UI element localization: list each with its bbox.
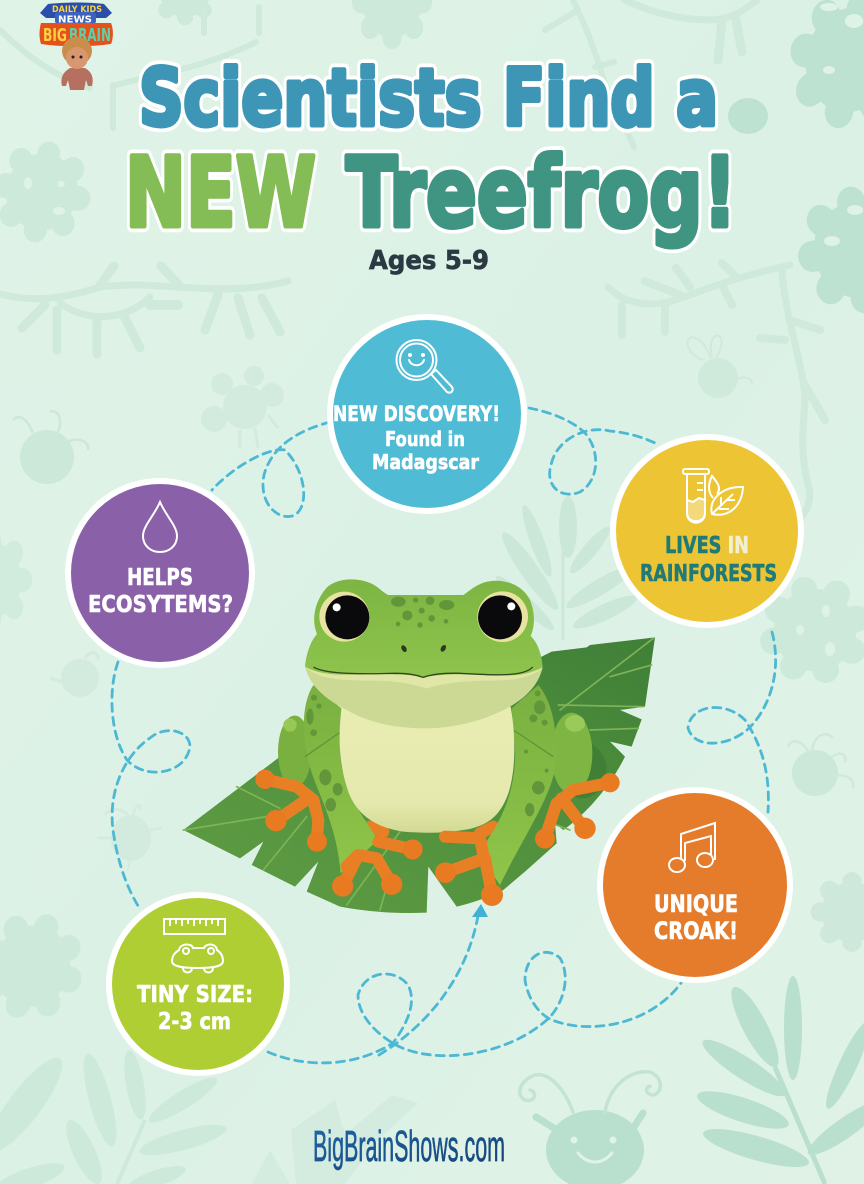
lip bbox=[305, 667, 543, 689]
node: unique croak: UNIQUE bbox=[654, 890, 738, 918]
title line 1 fill: Scientists Find a bbox=[139, 54, 718, 144]
node: tiny size bbox=[109, 895, 287, 1073]
bottom smiling bug bbox=[520, 1072, 660, 1184]
front feet bbox=[343, 837, 492, 895]
node: new discovery bbox=[330, 317, 524, 511]
fern bottom left bbox=[0, 1049, 418, 1184]
leaf shadow bbox=[557, 742, 607, 798]
icon: music notes bbox=[669, 823, 715, 872]
monstera holes bbox=[24, 3, 863, 656]
fern bottom right bbox=[694, 976, 864, 1184]
node: lives in rainforests: RAINFORESTS bbox=[640, 561, 777, 587]
title bbox=[125, 54, 737, 249]
belly bbox=[340, 707, 514, 833]
back feet bbox=[265, 779, 610, 842]
node: lives in rainforests: LIVES IN bbox=[665, 533, 749, 559]
back thighs bbox=[278, 713, 592, 794]
node: new discovery: Found in bbox=[385, 427, 465, 451]
background bugs bbox=[13, 336, 853, 870]
title NEW outline: NEW bbox=[125, 137, 316, 249]
title Treefrog: Treefrog! bbox=[346, 137, 737, 249]
head bbox=[305, 579, 543, 677]
subtitle: Ages 5-9 bbox=[369, 246, 489, 276]
eyes bbox=[319, 591, 528, 642]
node: helps ecosystems: HELPS bbox=[127, 565, 193, 591]
icon: ruler and frog bbox=[164, 919, 225, 972]
icon: water drop bbox=[143, 502, 177, 552]
small pebble bbox=[728, 98, 768, 134]
vines bbox=[0, 0, 825, 530]
node: unique croak bbox=[600, 790, 790, 980]
arm spots bbox=[306, 690, 549, 816]
leaf veins bbox=[183, 638, 653, 910]
title line 1 outline: Scientists Find a bbox=[139, 54, 718, 144]
node: helps ecosystems: ECOSYTEMS? bbox=[88, 592, 233, 618]
node: unique croak: CROAK! bbox=[654, 917, 738, 945]
icon: magnifying glass bbox=[396, 340, 453, 393]
logo: Daily Kids News with Big Brain: BRAIN bbox=[69, 25, 111, 46]
head spots bbox=[391, 596, 454, 628]
logo: Daily Kids News with Big Brain: DAILY KIDS bbox=[52, 5, 102, 15]
node: helps ecosystems bbox=[68, 481, 252, 665]
node: new discovery: NEW DISCOVERY! bbox=[333, 402, 500, 426]
throat bbox=[305, 667, 543, 728]
leaf bbox=[183, 637, 655, 913]
logo: Daily Kids News with Big Brain: NEWS bbox=[58, 14, 92, 26]
logo: Daily Kids News with Big Brain: BIG bbox=[43, 25, 67, 46]
node: lives in rainforests bbox=[613, 437, 801, 625]
logo: Daily Kids News with Big Brain bbox=[40, 2, 113, 90]
title Treefrog outline: Treefrog! bbox=[346, 137, 737, 249]
arms bbox=[304, 685, 378, 873]
fern behind frog bbox=[492, 496, 640, 640]
node: new discovery: Madagscar bbox=[372, 450, 479, 474]
nostrils and mouth bbox=[314, 644, 532, 677]
dashed flight paths bbox=[112, 408, 776, 1063]
icon: test tube and leaves bbox=[683, 469, 743, 523]
title NEW: NEW bbox=[125, 137, 316, 249]
node: tiny size: TINY SIZE: bbox=[137, 982, 253, 1008]
node: tiny size: 2-3 cm bbox=[158, 1009, 231, 1035]
arrow head bbox=[472, 904, 488, 917]
text: BigBrainShows.com bbox=[313, 1122, 505, 1171]
frog on leaf bbox=[183, 579, 655, 913]
